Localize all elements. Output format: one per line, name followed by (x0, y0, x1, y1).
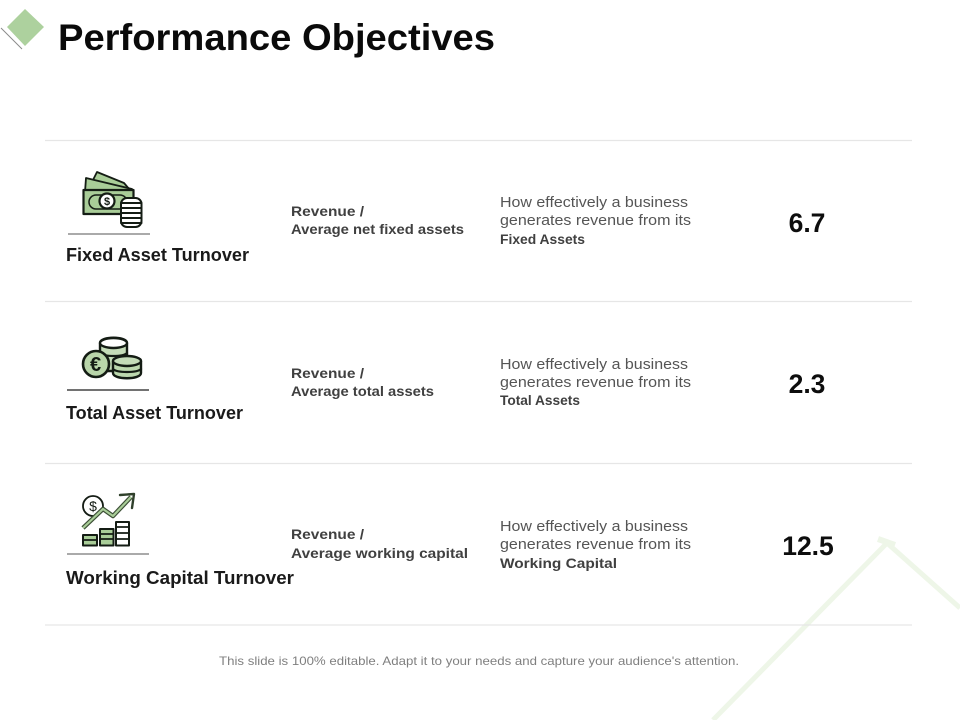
icon: dollar coin, rising arrow and bars (83, 494, 134, 546)
row: total asset turnover (66, 338, 825, 423)
value: 2.3 (789, 369, 825, 399)
underline (68, 233, 150, 235)
formula: Average total assets (291, 383, 434, 399)
heading: Total Asset Turnover (66, 403, 243, 423)
description: How effectively a business (500, 519, 688, 535)
description: How effectively a business (500, 357, 688, 373)
description: Total Assets (500, 392, 580, 408)
formula: Average working capital (291, 545, 468, 561)
icon: banknotes and coin stack (84, 172, 142, 227)
description (500, 357, 691, 408)
formula (291, 365, 434, 399)
icon: euro coin and coin stacks: € (90, 354, 101, 376)
description: generates revenue from its (500, 375, 691, 391)
description: generates revenue from its (500, 213, 691, 229)
description: generates revenue from its (500, 537, 691, 553)
icon: dollar coin, rising arrow and bars: $ (89, 498, 97, 514)
formula: Average net fixed assets (291, 221, 464, 237)
formula (291, 203, 464, 237)
logo: green diamond (1, 9, 44, 49)
footer note: This slide is 100% editable. Adapt it to your needs and capture your audience's attention. (219, 654, 739, 668)
heading: Fixed Asset Turnover (66, 245, 249, 265)
icon: euro coin and coin stacks (83, 338, 141, 378)
description: Fixed Assets (500, 231, 585, 247)
title: Performance Objectives (58, 17, 495, 58)
description: How effectively a business (500, 195, 688, 211)
icon: banknotes and coin stack: $ (104, 196, 110, 208)
row: fixed asset turnover (66, 172, 825, 265)
value: 12.5 (782, 531, 834, 561)
underline (67, 553, 149, 555)
underline (67, 389, 149, 391)
value: 6.7 (789, 208, 825, 238)
formula: Revenue / (291, 203, 364, 219)
formula: Revenue / (291, 365, 364, 381)
decorative corner chevron (713, 539, 960, 720)
description (500, 195, 691, 247)
description: Working Capital (500, 555, 617, 571)
heading: Working Capital Turnover (66, 568, 294, 588)
row: working capital turnover (66, 494, 834, 588)
description (500, 519, 691, 571)
formula (291, 526, 468, 561)
formula: Revenue / (291, 526, 364, 542)
